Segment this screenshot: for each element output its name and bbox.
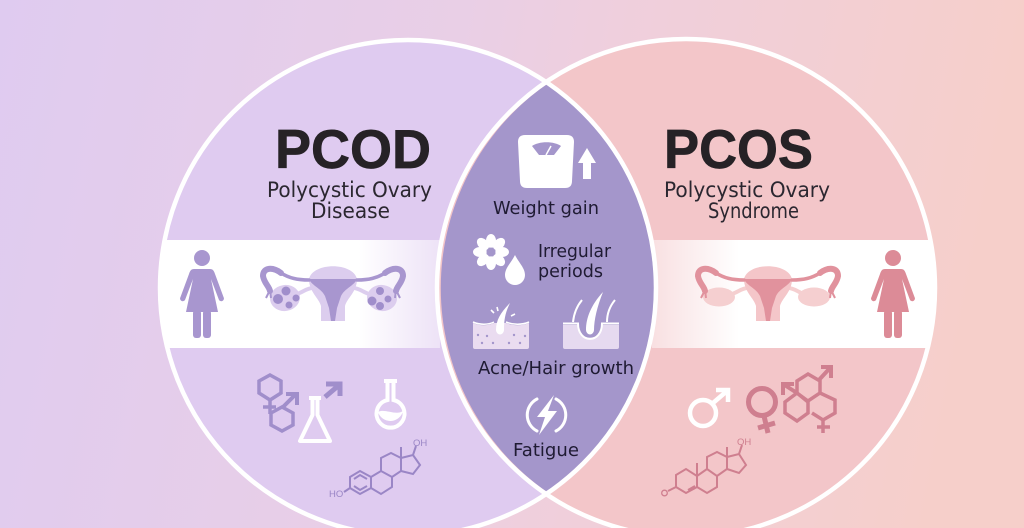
circle outlines	[160, 39, 935, 528]
label: Fatigue: Fatigue	[513, 441, 579, 461]
icon: round flask	[377, 381, 405, 428]
chemical structure: testosterone	[662, 437, 751, 496]
label: Irregular periods: Irregular	[538, 242, 612, 262]
subtitle: Polycystic Ovary Syndrome: Polycystic Ovary	[664, 178, 830, 202]
chemical structure: testosterone: OH	[737, 437, 751, 448]
icon: female symbol	[748, 388, 776, 433]
title: PCOD: PCOD	[275, 118, 431, 180]
title: PCOS: PCOS	[664, 118, 813, 180]
panel: PCOD circle	[162, 42, 542, 528]
label: Acne/Hair growth: Acne/Hair growth	[478, 359, 634, 379]
chemical structure: estradiol: OH	[413, 438, 427, 449]
subtitle: Polycystic Ovary Disease: Disease	[311, 199, 390, 223]
icon: hexagons with gender symbols	[259, 375, 297, 431]
icon: woman pink	[871, 250, 915, 338]
icon: conical flask with arrow	[300, 384, 340, 441]
icon: flower and drop	[473, 234, 525, 285]
icon: hair follicle	[563, 292, 619, 349]
icon: hexagons pink	[783, 367, 835, 433]
icon: woman purple	[180, 250, 224, 338]
panel: PCOS circle	[430, 30, 950, 528]
subtitle: Polycystic Ovary Syndrome: Syndrome	[708, 199, 799, 223]
chemical structure: estradiol: HO	[329, 489, 343, 500]
icon: uterus with cystic ovaries	[263, 266, 403, 321]
panel: overlap lens	[441, 84, 654, 492]
chemical structure: estradiol	[329, 438, 427, 500]
subtitle: Polycystic Ovary Disease: Polycystic Ovary	[267, 178, 432, 202]
subtitle: Polycystic Ovary Disease	[267, 178, 432, 223]
subtitle: Polycystic Ovary Syndrome	[664, 178, 830, 223]
label: Irregular periods	[538, 242, 612, 282]
icon: weighing scale with arrow	[518, 135, 596, 188]
icon: uterus pink	[698, 266, 838, 321]
icon: fatigue lightning	[527, 395, 566, 435]
label: Weight gain: Weight gain	[493, 199, 599, 219]
icon: acne skin	[473, 303, 529, 349]
label: Irregular periods: periods	[538, 262, 603, 282]
icon: male symbol	[690, 390, 728, 426]
